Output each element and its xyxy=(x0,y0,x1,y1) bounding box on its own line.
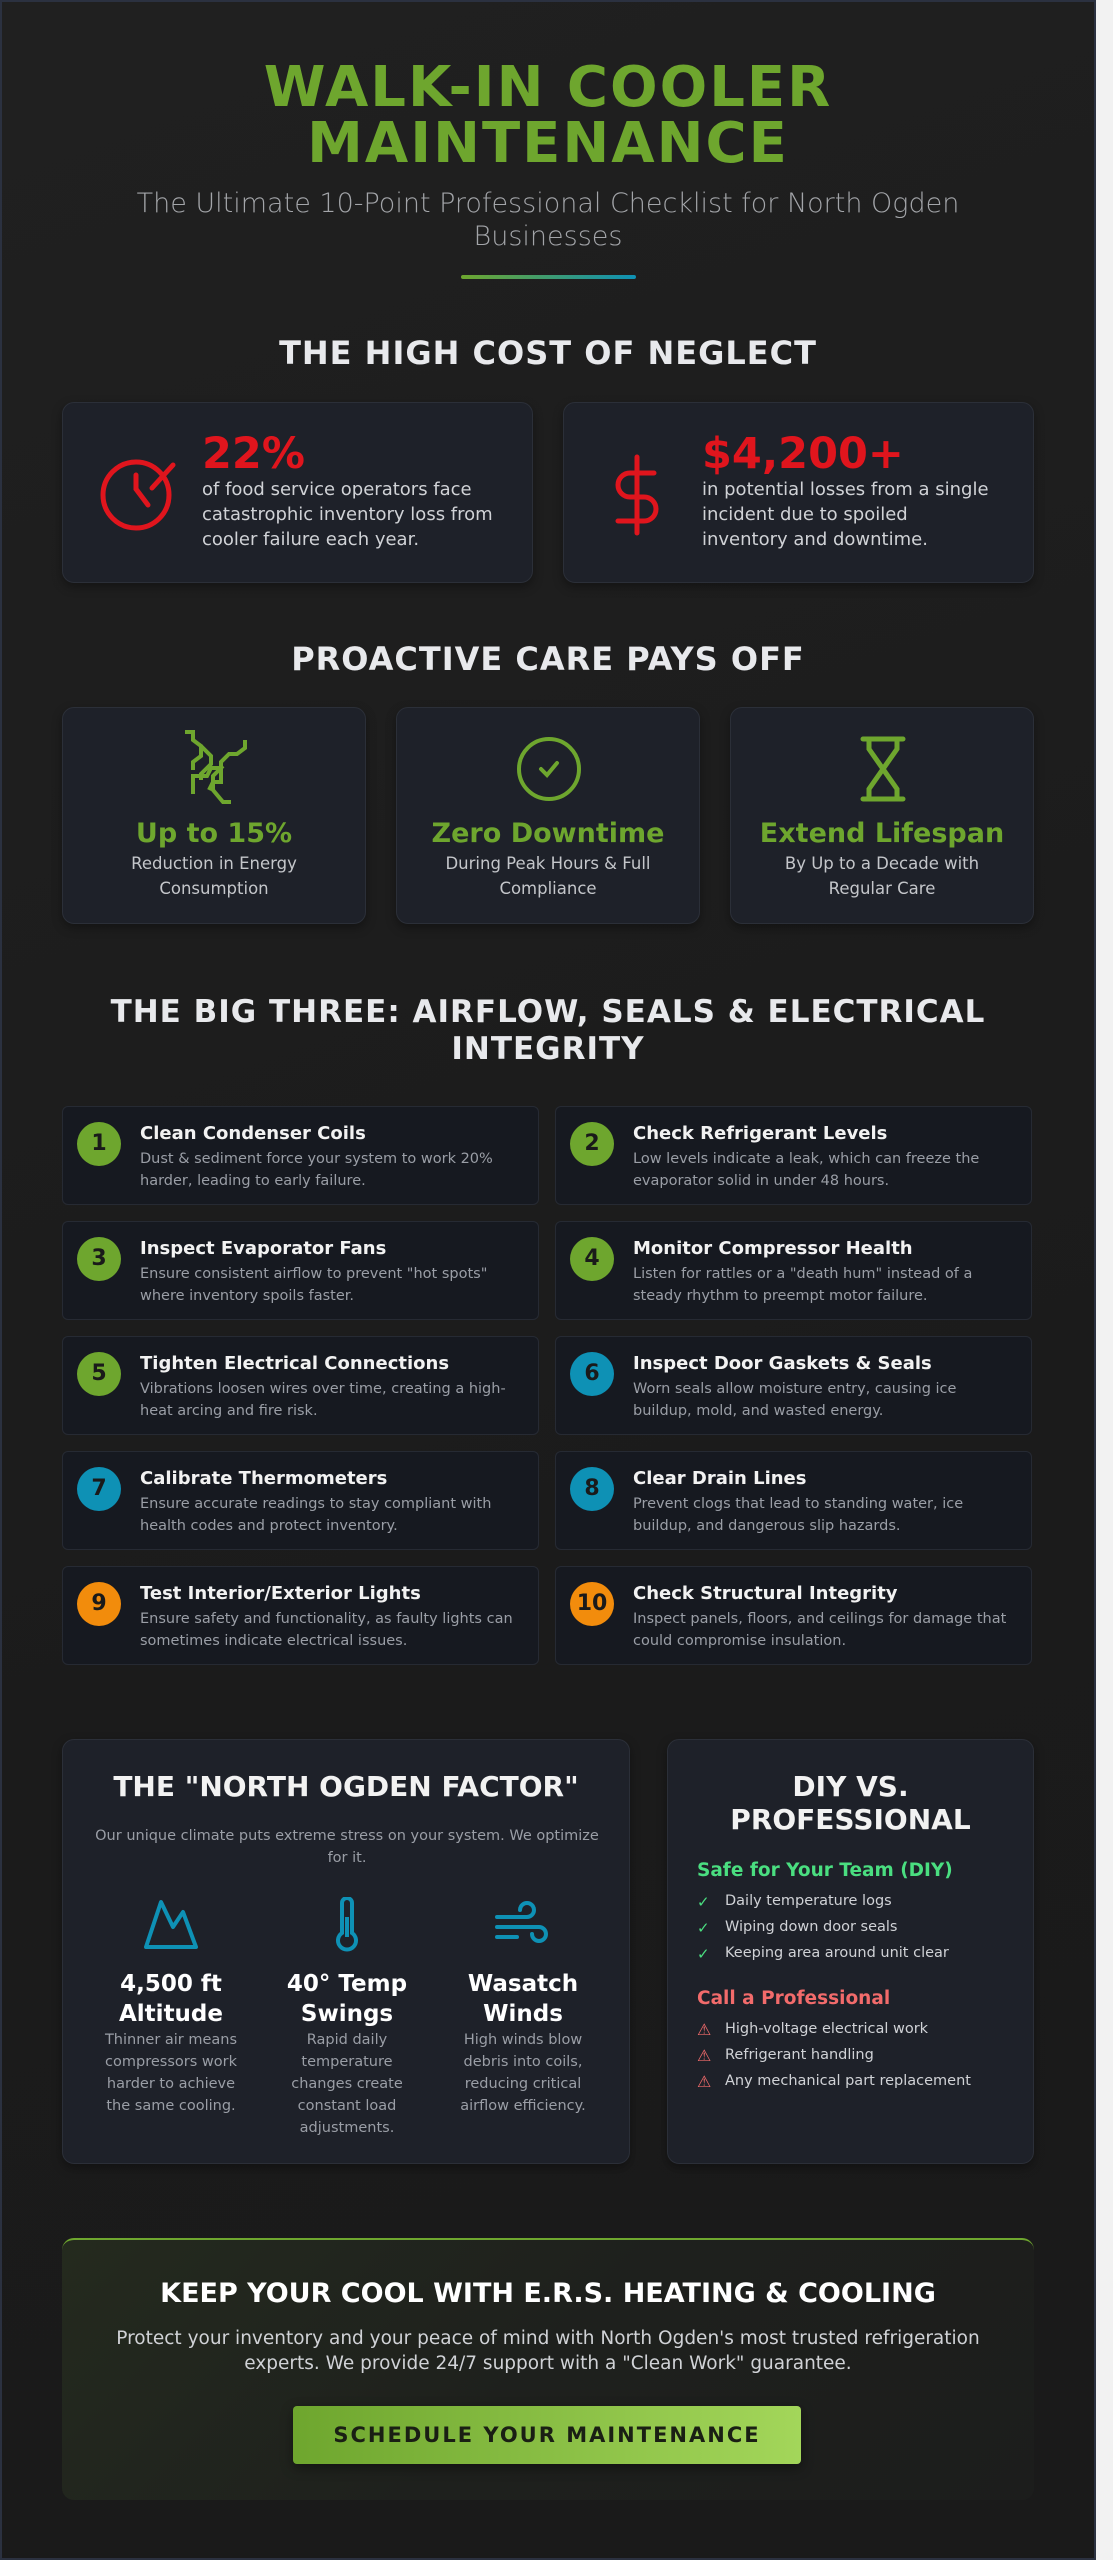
item 5: Vibrations loosen wires over time, creating a high-heat arcing and fire risk. xyxy=(140,1381,506,1419)
stat text: in potential losses from a single incident due to spoiled xyxy=(702,479,989,525)
benefit text: By Up to a Decade with Regular Care xyxy=(785,854,979,898)
stat text: 22% xyxy=(202,429,305,479)
factor: altitude xyxy=(104,1900,237,2114)
panel: 22% stat xyxy=(62,402,533,583)
icon: check circle xyxy=(517,737,581,801)
item 4 xyxy=(555,1221,1032,1320)
CTA button: SCHEDULE YOUR MAINTENANCE xyxy=(333,2423,761,2447)
icon: wind xyxy=(495,1901,548,1943)
icon: clock xyxy=(100,460,176,530)
factor: altitude: Thinner air means compressors work harder to achieve the same cooling. xyxy=(105,2032,237,2114)
item 10: Inspect panels, floors, and ceilings for damage that could compromise insulation. xyxy=(633,1611,1006,1649)
professional list: Refrigerant handling xyxy=(725,2047,874,2063)
item 1: Dust & sediment force your system to work 20% harder, leading to early failure. xyxy=(140,1151,493,1189)
benefit heading: Up to 15% xyxy=(136,818,292,849)
item 9: 9 xyxy=(91,1591,107,1616)
item 5: Tighten Electrical Connections xyxy=(140,1353,449,1374)
professional list xyxy=(697,1988,971,2091)
icon: dollar xyxy=(616,454,658,536)
item 7: Calibrate Thermometers xyxy=(140,1468,387,1489)
CTA button xyxy=(293,2406,801,2464)
item 8: Prevent clogs that lead to standing water, ice buildup, and dangerous slip hazards. xyxy=(633,1496,963,1534)
item 2: Check Refrigerant Levels xyxy=(633,1123,887,1144)
item 1: Clean Condenser Coils xyxy=(140,1123,366,1144)
item 5: 5 xyxy=(91,1361,107,1386)
panel: call to action xyxy=(62,2238,1034,2500)
heading: proactive care: PROACTIVE CARE PAYS OFF xyxy=(291,640,805,678)
panel heading: PROFESSIONAL xyxy=(730,1803,971,1836)
panel: downtime xyxy=(396,707,700,924)
benefit text: Reduction in Energy Consumption xyxy=(131,854,297,898)
item 8: 8 xyxy=(584,1476,600,1501)
item 10: Check Structural Integrity xyxy=(633,1583,898,1604)
stat text xyxy=(202,429,493,550)
panel heading: DIY VS. xyxy=(792,1770,909,1803)
DIY list: Wiping down door seals xyxy=(725,1919,897,1935)
benefit heading: Zero Downtime xyxy=(432,818,664,849)
panel: $4,200+ stat xyxy=(563,402,1034,583)
intro text: Our unique climate puts extreme stress on your system. We optimize for it. xyxy=(95,1828,599,1866)
factor: temp swings: Swings xyxy=(301,2001,393,2027)
item 7: Ensure accurate readings to stay compliant with health codes and protect inventory. xyxy=(140,1496,491,1534)
item 9 xyxy=(62,1566,539,1665)
icon: energy network xyxy=(185,730,247,804)
item 6 xyxy=(555,1336,1032,1435)
title: WALK-IN COOLER xyxy=(264,55,832,120)
DIY list: ✓ xyxy=(697,1945,710,1963)
professional list: ⚠ xyxy=(697,2020,711,2039)
panel: north ogden factor xyxy=(62,1739,630,2164)
item 7: 7 xyxy=(91,1476,107,1501)
item 4: Listen for rattles or a "death hum" instead of a steady rhythm to preempt motor failure. xyxy=(633,1266,972,1304)
benefit text: During Peak Hours & Full Compliance xyxy=(445,854,651,898)
factor: temp swings: 40° Temp xyxy=(287,1971,407,1997)
stat text xyxy=(702,429,989,550)
item 9: Ensure safety and functionality, as faulty lights can sometimes indicate electrical issues. xyxy=(140,1611,513,1649)
heading: big three: THE BIG THREE: AIRFLOW, SEALS & ELECTRICAL INTEGRITY xyxy=(111,994,985,1067)
item 1 xyxy=(62,1106,539,1205)
panel heading: THE "NORTH OGDEN FACTOR" xyxy=(113,1770,579,1803)
icon: thermometer xyxy=(336,1897,358,1952)
panel heading xyxy=(730,1770,971,1836)
DIY list: ✓ xyxy=(697,1893,710,1911)
CTA heading: KEEP YOUR COOL WITH E.R.S. HEATING & COOLING xyxy=(160,2278,936,2309)
item 3: Ensure consistent airflow to prevent "hot spots" where inventory spoils faster. xyxy=(140,1266,487,1304)
factor: temp swings xyxy=(287,1897,407,2136)
professional list: High-voltage electrical work xyxy=(725,2021,928,2037)
professional list: ⚠ xyxy=(697,2046,711,2065)
item 10 xyxy=(555,1566,1032,1665)
CTA text: Protect your inventory and your peace of mind with North Ogden's most trusted refrigeration experts. We provide 24/7 support with a "Clean Work" guarantee. xyxy=(116,2328,980,2374)
professional list: Any mechanical part replacement xyxy=(725,2073,971,2089)
item 1: 1 xyxy=(91,1131,107,1156)
item 2: Low levels indicate a leak, which can freeze the evaporator solid in under 48 hours. xyxy=(633,1151,979,1189)
DIY list: Daily temperature logs xyxy=(725,1893,892,1909)
item 2 xyxy=(555,1106,1032,1205)
item 5 xyxy=(62,1336,539,1435)
checklist xyxy=(62,1106,1032,1665)
factor: winds: Winds xyxy=(483,2001,563,2027)
professional list: ⚠ xyxy=(697,2072,711,2091)
factor: winds xyxy=(460,1901,586,2114)
benefit heading: Extend Lifespan xyxy=(760,818,1004,849)
professional list: Call a Professional xyxy=(697,1988,890,2009)
factor: temp swings: Rapid daily temperature changes create constant load adjustments. xyxy=(291,2032,403,2136)
panel: energy xyxy=(62,707,366,924)
item 2: 2 xyxy=(584,1131,600,1156)
item 6: Inspect Door Gaskets & Seals xyxy=(633,1353,932,1374)
DIY list xyxy=(697,1860,953,1963)
stat text: $4,200+ xyxy=(702,429,904,479)
subtitle: The Ultimate 10-Point Professional Checklist for North Ogden Businesses xyxy=(137,188,959,252)
DIY list: Keeping area around unit clear xyxy=(725,1945,949,1961)
factor: winds: High winds blow debris into coils, reducing critical airflow efficiency. xyxy=(460,2032,586,2114)
factor: altitude: 4,500 ft xyxy=(120,1971,222,1997)
item 7 xyxy=(62,1451,539,1550)
factor: altitude: Altitude xyxy=(119,2001,223,2027)
icon: hourglass xyxy=(860,736,906,802)
factor: winds: Wasatch xyxy=(468,1971,578,1997)
item 4: 4 xyxy=(584,1246,600,1271)
item 9: Test Interior/Exterior Lights xyxy=(140,1583,421,1604)
item 6: Worn seals allow moisture entry, causing ice buildup, mold, and wasted energy. xyxy=(633,1381,956,1419)
item 8: Clear Drain Lines xyxy=(633,1468,806,1489)
item 8 xyxy=(555,1451,1032,1550)
panel: DIY vs professional xyxy=(667,1739,1034,2164)
item 4: Monitor Compressor Health xyxy=(633,1238,913,1259)
item 6: 6 xyxy=(584,1361,600,1386)
icon: mountain xyxy=(144,1900,198,1949)
item 3 xyxy=(62,1221,539,1320)
stat text: inventory and downtime. xyxy=(702,529,928,550)
accent bar xyxy=(461,275,636,279)
DIY list: ✓ xyxy=(697,1919,710,1937)
stat text: of food service operators face catastrophic inventory loss from cooler failure each year. xyxy=(202,479,493,550)
item 3: Inspect Evaporator Fans xyxy=(140,1238,386,1259)
panel: lifespan xyxy=(730,707,1034,924)
item 3: 3 xyxy=(91,1246,107,1271)
heading: high cost of neglect: THE HIGH COST OF NEGLECT xyxy=(279,334,817,372)
item 10: 10 xyxy=(577,1591,607,1616)
title xyxy=(264,55,832,176)
DIY list: Safe for Your Team (DIY) xyxy=(697,1860,953,1881)
title: MAINTENANCE xyxy=(307,111,789,176)
